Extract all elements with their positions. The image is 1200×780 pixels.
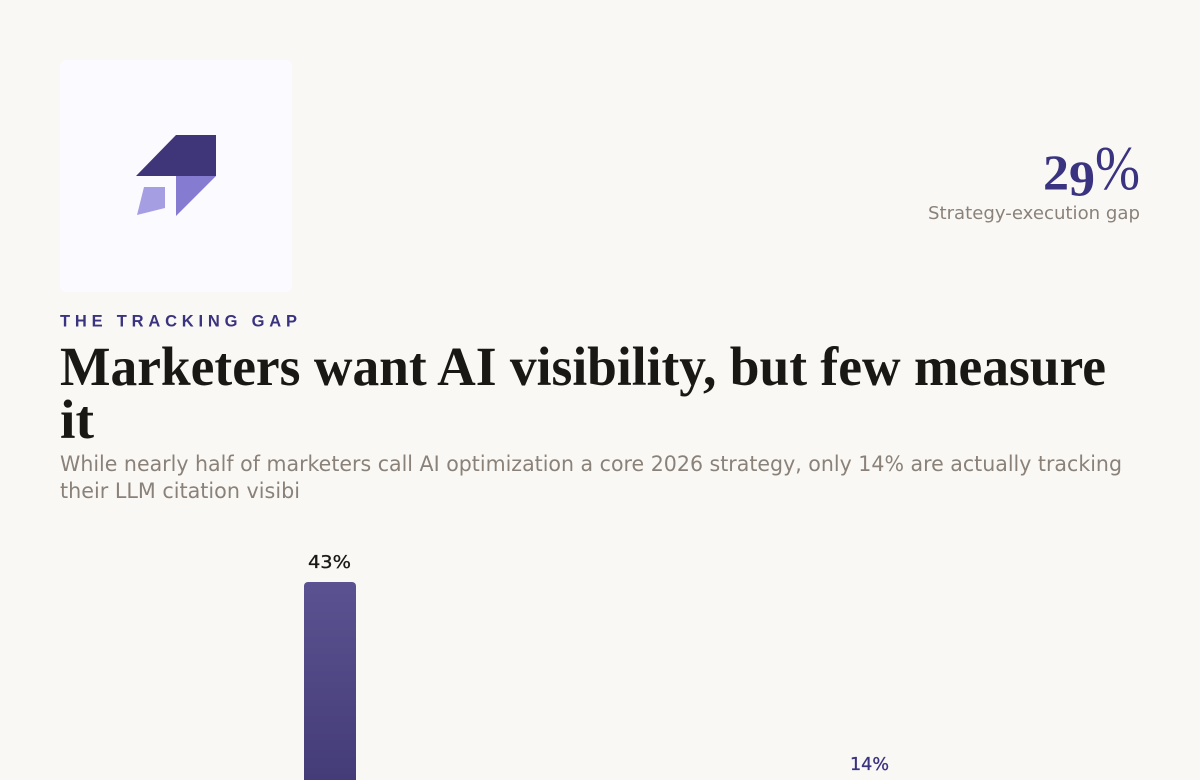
bar chart bbox=[304, 552, 889, 780]
stat label: Strategy-execution gap bbox=[928, 203, 1140, 224]
subtitle bbox=[60, 452, 1122, 503]
bar: 43% bbox=[304, 582, 356, 780]
bar label: 14%: 14% bbox=[850, 754, 889, 775]
subtitle: While nearly half of marketers call AI optimization a core 2026 strategy, only 14% are actually tracking bbox=[60, 452, 1122, 476]
stat value bbox=[1043, 135, 1140, 206]
stat value: 2 bbox=[1043, 144, 1069, 200]
icon: logo mark bbox=[136, 135, 216, 216]
stat: strategy-execution gap bbox=[928, 135, 1140, 224]
bar label: 43%: 43% bbox=[308, 552, 351, 573]
title: it bbox=[60, 389, 95, 450]
title bbox=[60, 336, 1106, 450]
title: Marketers want AI visibility, but few measure bbox=[60, 336, 1106, 397]
stat value: 9 bbox=[1069, 150, 1095, 206]
stat value: % bbox=[1095, 135, 1140, 203]
subtitle: their LLM citation visibi bbox=[60, 479, 300, 503]
logo card bbox=[60, 60, 292, 292]
eyebrow: THE TRACKING GAP bbox=[60, 312, 297, 330]
